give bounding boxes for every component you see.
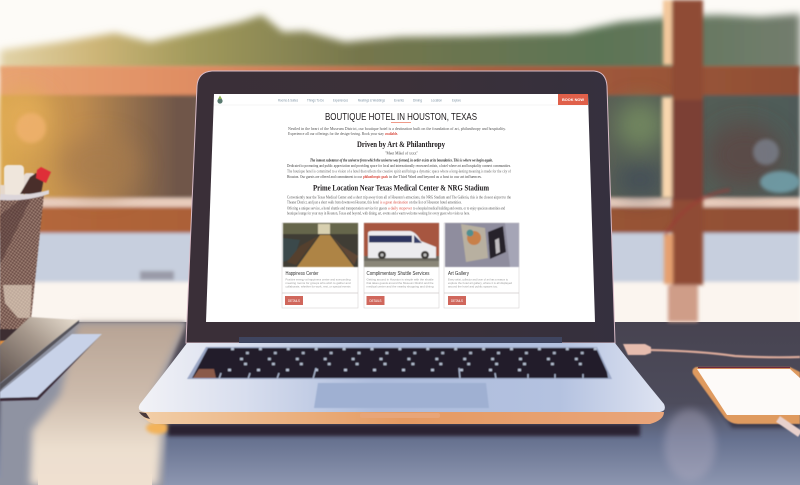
trackpad	[314, 383, 489, 408]
title underline	[391, 122, 411, 123]
nav links	[278, 98, 462, 102]
photo: shuttle van	[364, 223, 439, 267]
card text: meeting rooms for groups who wish to gather and	[286, 281, 351, 285]
lens flares	[16, 113, 800, 193]
keycap highlights	[228, 349, 600, 370]
details button: DETAILS	[370, 299, 382, 303]
card text: collaborate, whether for work, rest, or special events	[286, 284, 351, 288]
location text: Theater District, and just a short walk from downtown Houston, this hotel	[287, 200, 379, 206]
window post	[662, 0, 730, 322]
card text	[448, 278, 512, 288]
smartphone	[692, 367, 800, 434]
card: happiness center	[282, 223, 358, 308]
intro paragraph: Experience all our offerings for the design-loving. Book your stay	[288, 132, 384, 136]
card text: Positive energy at happiness center and surrounding	[286, 278, 351, 282]
card text	[366, 278, 434, 288]
blurred hills	[0, 14, 800, 72]
location text: is a great destination	[380, 200, 408, 204]
photo: conference table	[283, 223, 358, 267]
card text: explore the hotel art gallery, where it is all displayed	[448, 281, 512, 285]
laptop lid	[186, 71, 615, 343]
keyboard	[187, 347, 612, 379]
nav bar	[214, 94, 588, 105]
details button: DETAILS	[288, 299, 300, 303]
location text: to a hospital medical building and events, or to enjoy spacious amenities and	[413, 206, 505, 212]
intro paragraph: Nestled in the heart of the Museum District, our boutique hotel is a destination built on the foundation of art, philanthropy and hospitality.	[288, 127, 506, 132]
nav links: Rooms & Suites	[278, 98, 298, 102]
nav links: Location	[431, 98, 442, 102]
art and philanthropy text: in the Third Ward and beyond as a host to our art influences.	[389, 175, 482, 179]
book now button: BOOK NOW	[562, 98, 585, 102]
screen	[206, 94, 595, 322]
nav links: Dining	[413, 98, 422, 102]
card title: Art Gallery	[448, 271, 469, 277]
nav links: Things To Do	[307, 98, 325, 102]
blurred window frame and glass	[0, 66, 800, 324]
heading: driven by art: Driven by Art & Philanthropy	[357, 139, 445, 149]
hinge	[239, 337, 562, 344]
logo	[217, 96, 223, 104]
location text: Conveniently near the Texas Medical Center and a short trip away from all of Houston's attractions, the NRG Stadium and The Galleria, this is the closest airport to the	[287, 196, 511, 200]
book now button	[558, 94, 588, 105]
location text: on the list of Houston hotel amenities.	[409, 200, 462, 204]
card text	[286, 278, 351, 288]
desk surface	[0, 322, 800, 485]
art and philanthropy text: Dedicated to promoting and public appreciation and providing space for local and internationally renowned artists, a hotel where art and hospitality connect communities.	[287, 164, 511, 169]
art and philanthropy text: "Meet Mikel of xxxx"	[385, 152, 418, 156]
photo: gallery wall	[445, 223, 519, 267]
nav links: Explore	[452, 98, 462, 102]
art and philanthropy text: The inmost substance of the universe from which the universe was formed, in order exists at its boundaries. This is where we begin again.	[310, 158, 493, 162]
nav links: Experiences	[333, 98, 348, 102]
card text: that takes guests around the Museum District and the	[366, 281, 434, 285]
card title: Happiness Center	[286, 271, 319, 277]
art and philanthropy text: philanthropic goals	[363, 175, 388, 179]
card: shuttle services	[364, 223, 439, 308]
details button: DETAILS	[451, 299, 463, 303]
charging cable	[623, 344, 800, 357]
card text: around the hotel and public spaces too.	[448, 284, 498, 288]
card text: medical center and the nearby shopping and dining	[366, 284, 434, 288]
notebook and papers	[0, 317, 102, 401]
pen holder with markers	[0, 165, 51, 346]
nav links: Events	[394, 98, 404, 102]
art and philanthropy text: The boutique hotel is committed to a vision of a hotel that reflects the creative spirit and brings a dynamic space where a long-lasting meaning is made for the city of	[287, 170, 512, 174]
sun flare and glass colours	[0, 90, 783, 195]
front edge	[140, 412, 664, 424]
card title: Complimentary Shuttle Services	[366, 271, 430, 277]
intro paragraph: available.	[385, 132, 398, 136]
page title: BOUTIQUE HOTEL IN HOUSTON, TEXAS	[325, 111, 477, 123]
laptop shadow	[168, 424, 640, 436]
art and philanthropy text: Houston. Our guests are offered and commitment to our	[287, 175, 363, 179]
laptop base	[139, 343, 665, 412]
notch	[360, 413, 440, 418]
location text: a daily stopover	[388, 206, 413, 210]
intro paragraph	[288, 127, 506, 136]
laptop	[139, 71, 665, 436]
card: art gallery	[444, 223, 519, 308]
card text: Getting around in Houston is simple with the shuttle	[366, 278, 434, 282]
location text: boutique lounge for your stay in Houston, Texas and beyond, with dining, art, events and a warm welcome waiting for every guest who visits us here.	[287, 212, 470, 216]
nav links: Meetings & Weddings	[358, 98, 385, 102]
location text	[287, 196, 511, 216]
location text: Offering a unique service, a hotel shuttle and transportation service for guests	[287, 206, 387, 212]
art and philanthropy text	[287, 152, 512, 179]
heading: prime location: Prime Location Near Texas Medical Center & NRG Stadium	[313, 182, 490, 192]
card text: Every artist, collector and lover of art has a reason to	[448, 278, 508, 282]
